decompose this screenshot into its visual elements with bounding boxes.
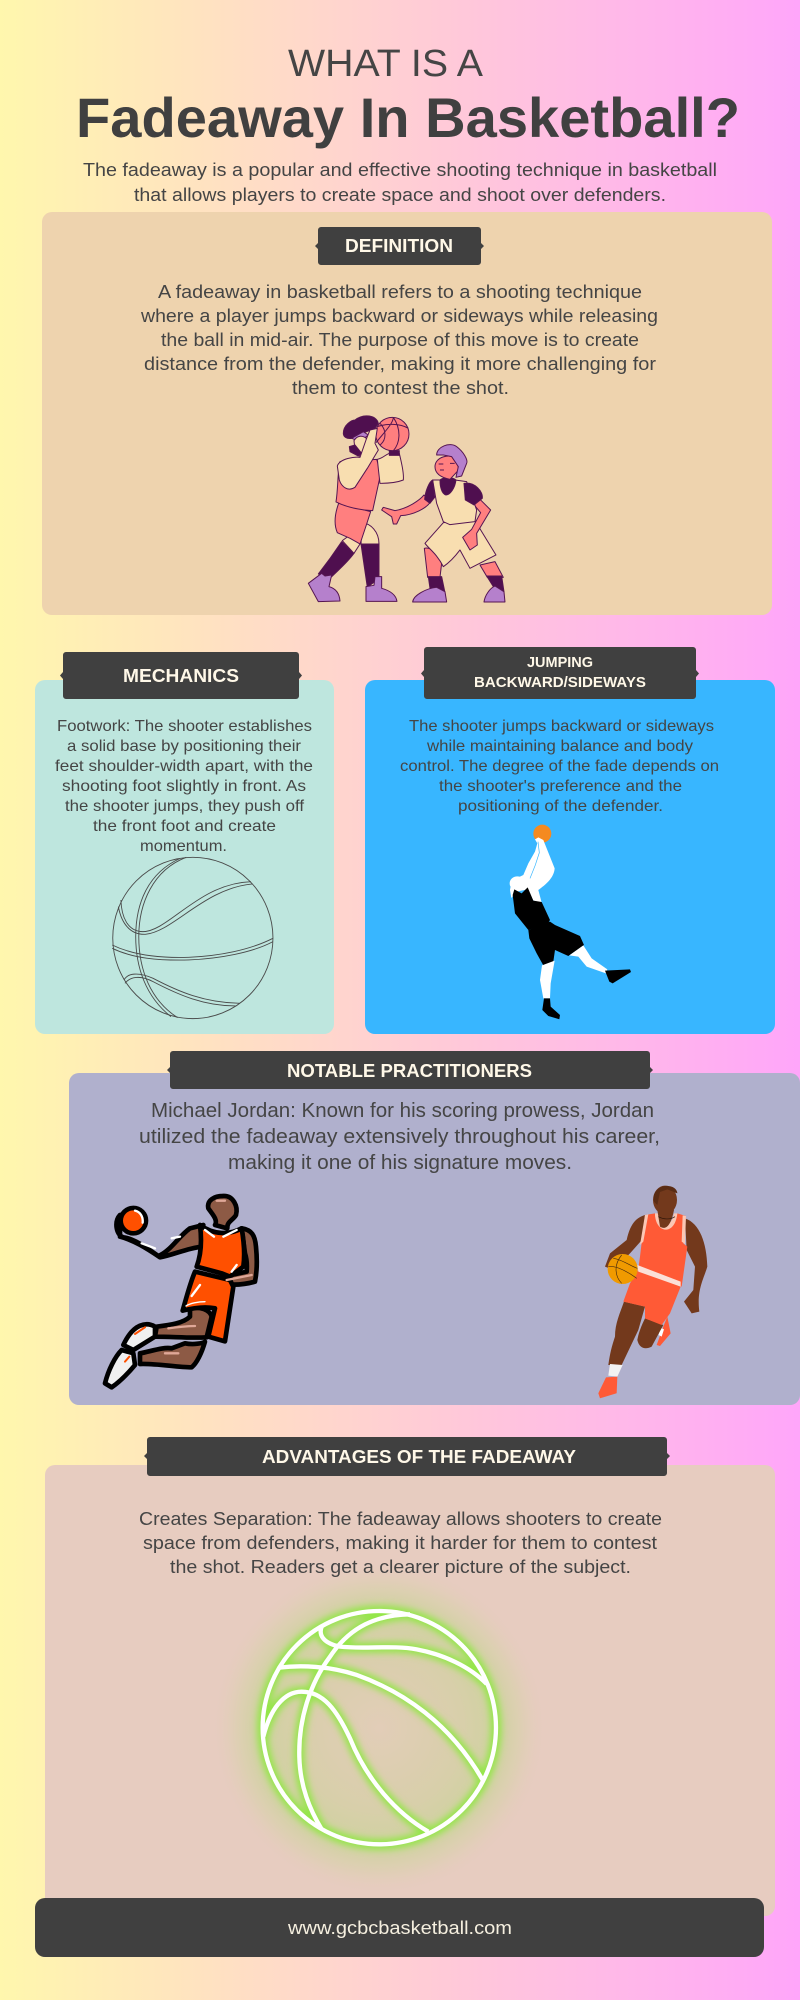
mechanics text: feet shoulder-width apart, with the <box>55 758 313 775</box>
mechanics text: the shooter jumps, they push off <box>65 798 305 815</box>
icon: outline basketball <box>112 857 273 1019</box>
jumping text: positioning of the defender. <box>458 798 663 815</box>
practitioners text: utilized the fadeaway extensively throughout his career, <box>139 1126 660 1148</box>
heading: definition <box>315 227 484 265</box>
illustration: two players <box>308 416 505 602</box>
title line 1: WHAT IS A <box>288 43 484 85</box>
heading: notable practitioners <box>167 1051 653 1089</box>
mechanics text <box>55 718 313 855</box>
heading: advantages of the fadeaway: ADVANTAGES OF THE FADEAWAY <box>262 1447 576 1467</box>
heading: mechanics <box>60 652 302 699</box>
panel: definition <box>42 212 772 615</box>
advantages text: the shot. Readers get a clearer picture of the subject. <box>170 1557 631 1577</box>
practitioners text <box>139 1100 660 1174</box>
footer bar: www.gcbcbasketball.com <box>287 1918 512 1938</box>
heading: advantages of the fadeaway <box>144 1437 670 1476</box>
panel: mechanics <box>35 652 334 1034</box>
mechanics text: shooting foot slightly in front. As <box>62 778 306 795</box>
illustration: fadeaway shooter silhouette <box>510 825 631 1019</box>
advantages text: space from defenders, making it harder for them to contest <box>143 1533 657 1553</box>
panel: advantages of the fadeaway <box>45 1437 775 1916</box>
mechanics text: momentum. <box>140 838 227 855</box>
practitioners text: making it one of his signature moves. <box>228 1152 572 1174</box>
intro text <box>83 160 717 205</box>
panel: notable practitioners <box>69 1051 800 1405</box>
mechanics text: a solid base by positioning their <box>67 738 302 755</box>
jumping text: control. The degree of the fade depends on <box>400 758 719 775</box>
advantages text: Creates Separation: The fadeaway allows shooters to create <box>139 1509 662 1529</box>
definition text: distance from the defender, making it more challenging for <box>144 354 656 374</box>
mechanics text: Footwork: The shooter establishes <box>57 718 312 735</box>
mechanics text: the front foot and create <box>93 818 276 835</box>
definition text <box>140 282 658 398</box>
intro text: that allows players to create space and shoot over defenders. <box>134 185 666 205</box>
jumping text: the shooter's preference and the <box>439 778 682 795</box>
title <box>76 43 740 149</box>
heading: jumping backward/sideways <box>421 647 699 699</box>
illustration: dribbling player <box>598 1186 707 1398</box>
shooter <box>308 416 409 602</box>
definition text: them to contest the shot. <box>292 378 509 398</box>
panel: jumping backward/sideways <box>365 647 775 1034</box>
intro text: The fadeaway is a popular and effective shooting technique in basketball <box>83 160 717 180</box>
definition text: where a player jumps backward or sideways while releasing <box>140 306 658 326</box>
heading: mechanics: MECHANICS <box>123 666 239 686</box>
footer bar <box>35 1898 764 1957</box>
heading: jumping backward/sideways: JUMPING <box>527 654 593 671</box>
defender <box>382 445 505 602</box>
icon: neon basketball <box>211 1560 547 1896</box>
jumping text <box>400 718 719 815</box>
practitioners text: Michael Jordan: Known for his scoring prowess, Jordan <box>151 1100 654 1122</box>
heading: jumping backward/sideways: BACKWARD/SIDEWAYS <box>474 674 646 691</box>
illustration: dunking player <box>105 1196 257 1387</box>
jumping text: while maintaining balance and body <box>426 738 693 755</box>
title line 2: Fadeaway In Basketball? <box>76 86 740 149</box>
definition text: A fadeaway in basketball refers to a shooting technique <box>158 282 642 302</box>
jumping text: The shooter jumps backward or sideways <box>409 718 714 735</box>
heading: definition: DEFINITION <box>345 236 453 256</box>
definition text: the ball in mid-air. The purpose of this move is to create <box>161 330 639 350</box>
advantages text <box>139 1509 662 1577</box>
heading: notable practitioners: NOTABLE PRACTITIONERS <box>287 1061 532 1081</box>
